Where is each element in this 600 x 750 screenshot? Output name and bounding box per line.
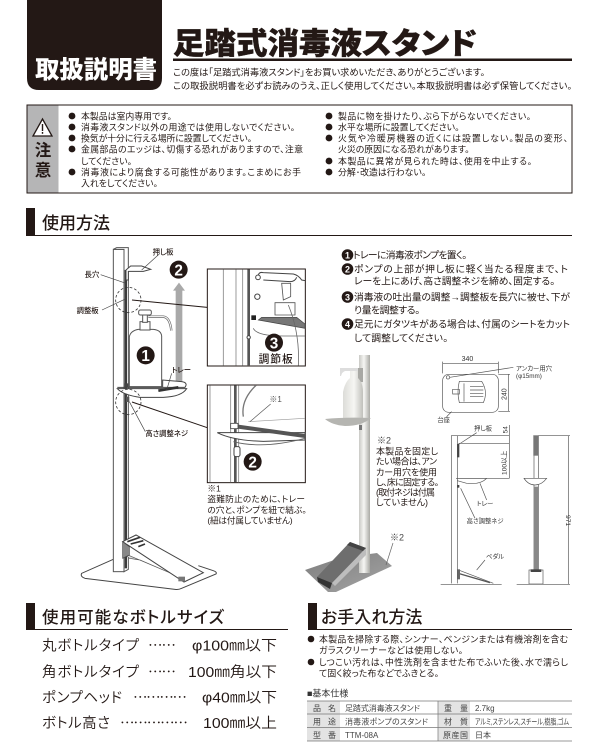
photo pole [359,355,370,573]
labels [77,248,191,438]
instruction steps: 消毒液の吐出量の調整→調整板を長穴に被せ、下が [354,290,570,304]
tray [117,380,187,402]
instruction steps: レーを上にあげ、高さ調整ネジを締め、固定する。 [354,274,555,288]
front view [517,436,571,584]
badge 1: 1 [141,348,150,365]
illustration: stand line drawing [77,248,307,590]
plan view: アンカー用穴 [516,364,553,372]
panel: caution [27,105,572,193]
bottle size list: φ100㎜以下 [192,638,277,654]
spec table cells: アルミ,ステンレス,スチール,樹脂,ゴム [475,716,569,726]
spec table cells: 番 [328,730,336,740]
caution list right [326,110,568,177]
side view: ペダル [486,551,505,560]
instruction steps: ポンプの上部が押し板に軽く当たる程度まで、ト [354,262,568,276]
heading: 使用方法: 使用方法 [42,214,110,233]
spec table cells: 途 [328,718,336,726]
note 2: し、床に固定する。 [376,478,439,488]
spec table cells: TTM-08A [345,731,379,740]
plan view [437,356,553,424]
spec table cells: 名 [328,703,336,713]
care text: 本製品を掃除する際、シンナー、ベンジンまたは有機溶剤を含む [319,633,568,644]
badge 2 [170,261,188,279]
side view: 54 [503,426,510,433]
pedal [123,535,203,582]
caution list right: 製品に物を掛けたり、ぶら下がらないでください。 [338,110,531,121]
plan view: (φ15mm) [516,373,542,380]
bottle size list: 100㎜角以下 [188,664,277,681]
caution list left: 金属部品のエッジは、切傷する恐れがありますので、注意 [81,143,303,154]
instruction steps: トレーに消毒液ポンプを置く。 [353,248,467,262]
heading: care: お手入れ方法 [321,608,422,627]
caution label: 注 [35,141,52,160]
product photo [305,355,392,592]
bottle size list: 100㎜以上 [203,715,277,732]
spec table cells: 原産国 [443,730,468,740]
bottle and pump [129,310,171,387]
base plate [81,559,216,590]
instruction steps: 4 [345,320,350,330]
spec table cells: 材 [444,716,452,726]
plan view: 台座 [437,415,451,424]
note 1 [207,483,307,526]
bottle size list: 角ボトルタイプ [42,664,140,681]
note 1: 盗難防止のために、トレー [207,493,305,504]
spec table: ■基本仕様 [307,688,348,698]
side view: 100以上 [500,450,509,475]
caution list left: 本製品は室内専用です。 [81,110,172,121]
spec table cells [307,701,572,741]
labels: 高さ調整ネジ [145,429,188,438]
spec table cells: 型 [313,731,321,740]
note 2: 本製品を固定し [376,446,439,456]
front view: 971 [564,515,571,526]
technical drawings [437,356,571,584]
leader: anchor hole [386,543,393,565]
bottle size list: …………… [120,712,188,733]
bottle size list: …… [148,661,176,682]
note 2: カー用穴を使用 [376,466,437,478]
badge 1 [137,346,155,365]
spec table cells: 質 [460,716,468,726]
caution label: 意 [35,161,52,180]
arrow up [173,283,185,382]
photo tray [325,418,371,426]
pole [113,248,128,572]
caution list left: 入れをしてください。 [81,178,158,188]
spec table [307,688,572,741]
bottle size list: ………… [133,686,187,708]
caution list right: 本製品に異常が見られた時は、使用を中止する。 [338,155,532,166]
instruction steps: 3 [345,292,350,302]
photo pedal [317,542,366,583]
note 2 [376,436,439,542]
photo bracket and bottle [340,368,363,420]
labels: 長穴 [85,270,100,279]
caution label [35,141,52,180]
spec table cells: 量 [460,704,468,713]
black tab: 取扱説明書 [27,0,162,90]
intro text: この取扱説明書を必ずお読みのうえ、正しく使用してください。本取扱説明書は必ず保管してください。 [173,80,572,91]
plan view: 240 [502,388,509,400]
side view: 高さ調整ネジ [467,516,504,525]
heading: bottle sizes: 使用可能なボトルサイズ [42,607,224,627]
instruction steps: して調整してください。 [354,332,448,344]
photo base plate [305,553,392,592]
side view: 押し板 [474,423,493,432]
spec table cells: 消毒液ポンプのスタンド [345,716,428,726]
caution list left: してください。 [81,156,132,166]
note 2: たい場合は、アン [376,456,437,466]
caution list left: 換気が十分に行える場所に設置してください。 [81,132,252,143]
note 2: ※2 [390,532,404,542]
caution list left: 消毒液により腐食する可能性があります。こまめにお手 [81,166,301,177]
bottle size list: φ40㎜以下 [202,690,277,706]
note 1: ※1 [207,483,221,493]
note 1: の穴と、ポンプを紐で結ぶ。 [207,504,307,515]
care text: ガラスクリーナーなどは使用しない。 [319,644,463,655]
icon: warning triangle [33,119,52,136]
bottle size list: ポンプヘッド [42,690,122,706]
care text [308,633,568,678]
labels: 調整板 [77,306,99,315]
labels: トレー [172,366,191,375]
caution list right: 水平な場所に設置してください。 [338,121,459,132]
caution list left: 消毒液スタンド以外の用途では使用しないでください。 [81,121,295,132]
plan view: 340 [462,356,473,363]
bottle size list: …… [148,634,176,656]
caution list right: 火気や冷暖房機器の近くには設置しない。製品の変形、 [338,132,568,143]
spec table cells: 重 [444,703,452,713]
instruction steps: り量を調整する。 [354,304,420,316]
care text: しつこい汚れは、中性洗剤を含ませた布でふいた後、水で濡らし [319,656,568,667]
dashed circles [116,287,141,415]
care text: て固く絞った布などでふきとる。 [319,667,439,678]
heading: care [308,603,572,630]
instruction steps: 足元にガタツキがある場合は、付属のシートをカット [354,318,570,330]
side view [441,423,510,584]
black tab: 取扱説明書: 取扱説明書 [35,56,157,84]
spec table cells: 足踏式消毒液スタンド [345,703,420,713]
side view: トレー [477,501,493,508]
badge 2: 2 [174,262,183,279]
labels: 押し板 [153,248,174,257]
caution list right: 分解･改造は行わない。 [338,166,426,177]
intro text [173,66,572,91]
note 2: ※2 [377,436,391,446]
bottle size list [42,634,277,733]
caution list right: 火災の原因になる恐れがあります。 [338,143,469,154]
inset: adjusting plate: 3 [270,335,278,352]
push plate [126,266,151,280]
instruction steps [342,248,570,344]
inset: adjusting plate: 調節板 [259,353,293,366]
intro text: この度は「足踏式消毒液スタンド」をお買い求めいただき、ありがとうございます。 [173,66,485,78]
inset: height screw: ※1 [269,395,282,404]
spec table cells: 品 [313,704,321,713]
title: 足踏式消毒液スタンド [173,28,477,61]
instruction steps: 2 [345,264,350,274]
bottle size list: ボトル高さ [42,715,110,732]
spec table cells: 用 [313,718,321,726]
inset: adjusting plate [207,269,305,366]
note 1: (紐は付属していません) [207,515,293,526]
heading: 使用方法 [26,208,572,236]
instruction steps: 1 [345,250,350,260]
note 2: していません) [376,498,428,508]
caution list left [69,110,303,188]
inset: height screw [207,385,305,483]
spec table cells: 2.7kg [475,704,495,713]
bottle size list: 丸ボトルタイプ [42,638,140,654]
note 2: (取付ネジは付属 [376,488,435,498]
spec table cells: 日本 [475,730,491,740]
leader lines [132,300,207,428]
inset: height screw: 2 [248,454,257,471]
heading: bottle sizes [26,603,288,630]
